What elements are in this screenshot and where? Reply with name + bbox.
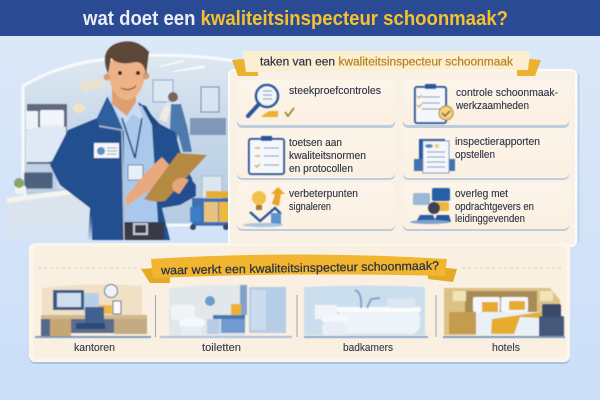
scene: bathroom xyxy=(304,286,428,337)
hair xyxy=(105,41,149,76)
card: verbeterpunten: verbeterpunten xyxy=(289,188,358,200)
ribbon: workplaces heading xyxy=(141,254,457,283)
title: wat doet een kwaliteitsinspecteur schoonmaak? xyxy=(82,7,508,30)
icon: bulb and growth arrow xyxy=(243,187,285,227)
eyes and mouth xyxy=(118,71,122,75)
card: toetsen: kwaliteitsnormen xyxy=(289,150,366,162)
inspector figure xyxy=(50,41,207,240)
icon: chat people xyxy=(410,188,451,224)
ribbon: workplaces heading: waar werkt een kwaliteitsinspecteur schoonmaak? xyxy=(160,259,439,277)
card: overleg xyxy=(403,183,569,231)
floor fade xyxy=(0,215,92,242)
label: badkamers: badkamers xyxy=(343,342,393,354)
name badge xyxy=(94,143,119,158)
hand xyxy=(172,178,192,194)
card: controle schoonmaakwerkzaamheden: werkzaamheden xyxy=(455,100,529,112)
scene: office xyxy=(35,284,151,337)
card: inspectierapporten xyxy=(403,129,569,180)
card: steekproefcontroles: steekproefcontroles xyxy=(289,85,381,97)
card: overleg: opdrachtgevers en xyxy=(455,201,534,213)
card: verbeterpunten: signaleren xyxy=(289,201,331,213)
label: kantoren: kantoren xyxy=(74,342,115,354)
card: inspectierapporten: opstellen xyxy=(455,149,495,161)
shirt xyxy=(110,100,158,222)
bed xyxy=(26,103,85,164)
clipboard xyxy=(144,153,207,202)
label: toiletten: toiletten xyxy=(202,342,241,354)
scene: toilets xyxy=(160,285,292,337)
card: controle schoonmaakwerkzaamheden xyxy=(403,80,569,128)
lanyard and card xyxy=(122,118,142,158)
reception counter xyxy=(7,160,94,240)
card: steekproefcontroles xyxy=(237,80,395,128)
panel: tasks xyxy=(229,51,580,246)
background cleaner xyxy=(159,92,192,152)
icon: checklist clipboard xyxy=(415,84,453,123)
card: toetsen: en protocollen xyxy=(289,163,353,175)
face xyxy=(109,56,146,100)
card: inspectierapporten: inspectierapporten xyxy=(455,136,540,148)
ceiling lights xyxy=(78,60,205,93)
zip line xyxy=(99,126,124,240)
card: toetsen: toetsen aan xyxy=(289,137,342,149)
panel: workplaces xyxy=(29,243,570,364)
icon: report xyxy=(414,139,455,173)
dividers xyxy=(156,295,436,337)
icon: magnifier xyxy=(248,85,294,117)
label: hotels: hotels xyxy=(492,342,520,354)
card: controle schoonmaakwerkzaamheden: controle schoonmaak- xyxy=(456,87,558,99)
ribbon: tasks heading: taken van een kwaliteitsinspecteur schoonmaak xyxy=(260,56,513,68)
scene: hotel room xyxy=(443,288,565,337)
jacket xyxy=(50,97,196,240)
header bar xyxy=(0,0,600,36)
card: verbeterpunten xyxy=(237,183,395,231)
back office desk xyxy=(190,87,226,135)
card: toetsen xyxy=(237,129,395,180)
ribbon: tasks heading xyxy=(232,51,541,76)
card: overleg: leidinggevenden xyxy=(455,213,525,225)
illustration: inspector in building interior xyxy=(0,41,240,242)
room arch xyxy=(23,55,240,225)
arm xyxy=(125,157,172,206)
neck xyxy=(112,88,136,116)
cleaning trolley xyxy=(190,176,232,230)
background window xyxy=(153,80,173,102)
icon: quality clipboard xyxy=(249,136,284,174)
card: overleg: overleg met xyxy=(455,188,508,200)
